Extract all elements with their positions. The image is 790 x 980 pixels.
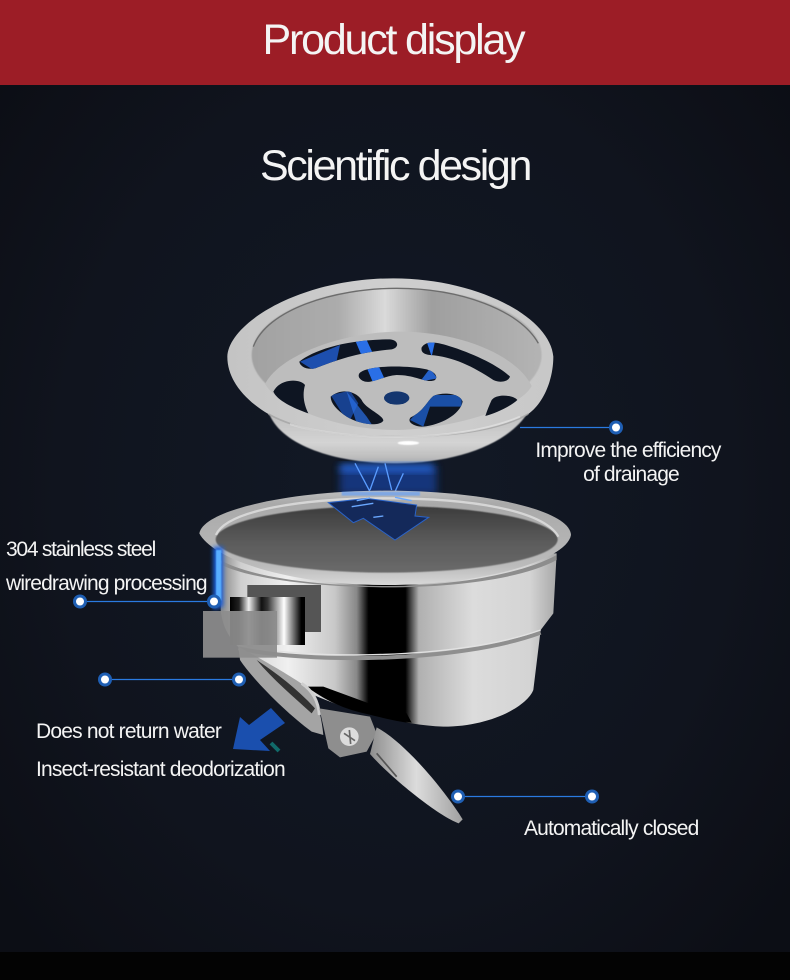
label: efficiency of drainage: Improve the efficiency xyxy=(535,439,721,462)
label: does not return water: Does not return water xyxy=(36,720,221,743)
callout line: automatically closed xyxy=(452,791,598,802)
product illustration xyxy=(0,233,790,980)
label: efficiency of drainage xyxy=(535,439,722,486)
callout line: drainage xyxy=(520,422,622,433)
title: Product display: Product display xyxy=(262,16,524,64)
label: automatically closed: Automatically closed xyxy=(524,817,698,840)
callout line: does not return water xyxy=(100,674,244,685)
callout line: wiredrawing xyxy=(74,596,220,607)
spring flap and hinge xyxy=(238,647,463,823)
drain cup xyxy=(199,491,571,727)
header bar xyxy=(0,0,790,85)
label: insect-resistant deodorization: Insect-resistant deodorization xyxy=(36,758,285,781)
strainer lid xyxy=(227,278,553,463)
label: 304 stainless steel: 304 stainless steel xyxy=(6,538,155,561)
blue arrow xyxy=(233,708,285,751)
label: wiredrawing processing: wiredrawing processing xyxy=(6,572,207,595)
blue light beam xyxy=(340,463,437,494)
censored patches xyxy=(203,585,321,658)
heading: Scientific design: Scientific design xyxy=(260,142,530,190)
label: efficiency of drainage: of drainage xyxy=(583,463,679,486)
blue falling fragments xyxy=(328,492,429,540)
